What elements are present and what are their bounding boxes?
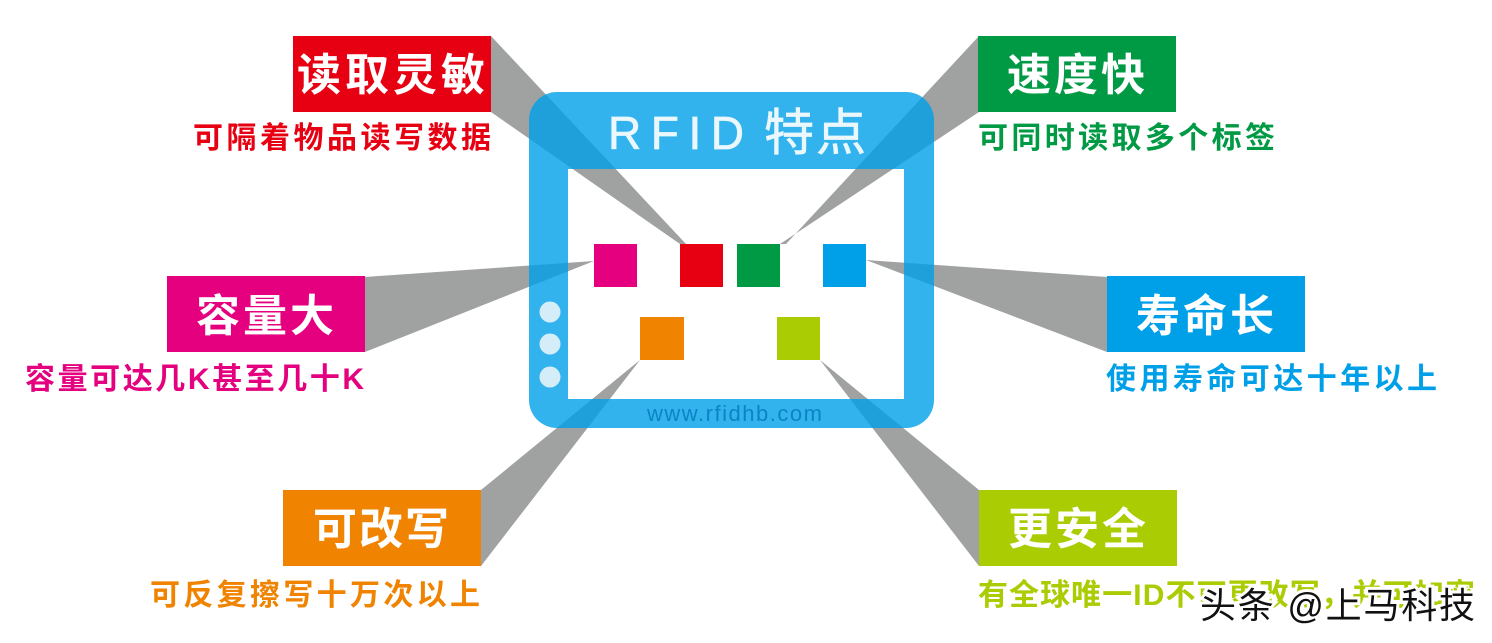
watermark: 头条 @上马科技: [1200, 585, 1475, 626]
title: RFID: [608, 107, 744, 159]
panel: more secure: 更安全: [1008, 505, 1146, 554]
panel: rewritable: 可反复擦写十万次以上: [150, 579, 480, 612]
panel: large capacity: 容量大: [196, 292, 334, 341]
square: green: [737, 244, 780, 287]
panel: more secure: [978, 490, 1475, 612]
connector: long life: [866, 260, 1107, 352]
panel: read sensitivity: [193, 36, 491, 155]
panel: long life: 使用寿命可达十年以上: [1106, 362, 1437, 396]
panel: rewritable: [150, 490, 481, 612]
title: [608, 105, 866, 161]
title: 特点: [764, 105, 866, 161]
panel: large capacity: 容量可达几K甚至几十K: [25, 363, 364, 396]
panel: fast speed: 可同时读取多个标签: [978, 122, 1275, 155]
square: magenta: [594, 244, 637, 287]
panel: large capacity: [25, 276, 365, 396]
device buttons: [540, 302, 560, 388]
connector: more secure: [820, 360, 979, 566]
panel: long life: [1106, 276, 1437, 396]
panel: rewritable: 可改写: [313, 505, 449, 554]
connector: fast speed: [780, 36, 979, 244]
panel: read sensitivity: 可隔着物品读写数据: [193, 122, 491, 155]
panel: more secure: 有全球唯一ID不可更改写，并可加密: [978, 579, 1475, 612]
panel: read sensitivity: 读取灵敏: [297, 51, 485, 100]
panel: fast speed: 速度快: [1007, 51, 1145, 100]
panel: long life: 寿命长: [1136, 292, 1274, 341]
website: www.rfidhb.com: [646, 401, 822, 426]
connector: large capacity: [365, 261, 594, 352]
square: red: [680, 244, 723, 287]
connector: read sensitivity: [491, 36, 686, 244]
device frame: [529, 92, 934, 428]
square: orange: [640, 317, 684, 360]
connector: rewritable: [481, 360, 640, 566]
square: lime: [777, 317, 820, 360]
panel: fast speed: [978, 36, 1275, 155]
square: blue: [823, 244, 866, 287]
